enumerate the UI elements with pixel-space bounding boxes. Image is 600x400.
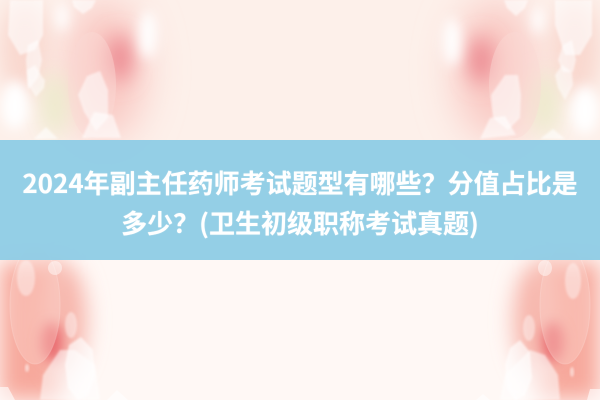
title band	[0, 140, 600, 260]
bokeh shapes: bottom left	[0, 246, 128, 400]
title: 2024年副主任药师考试题型有哪些？分值占比是	[22, 164, 578, 201]
title	[22, 164, 578, 241]
background wash: bottom half	[0, 260, 600, 400]
bokeh shapes: top left	[8, 0, 121, 139]
bokeh shapes: bottom right	[476, 246, 600, 400]
bokeh shapes: top right	[480, 0, 592, 139]
title: 多少？(卫生初级职称考试真题)	[121, 204, 479, 241]
background wash: top half	[0, 0, 600, 140]
